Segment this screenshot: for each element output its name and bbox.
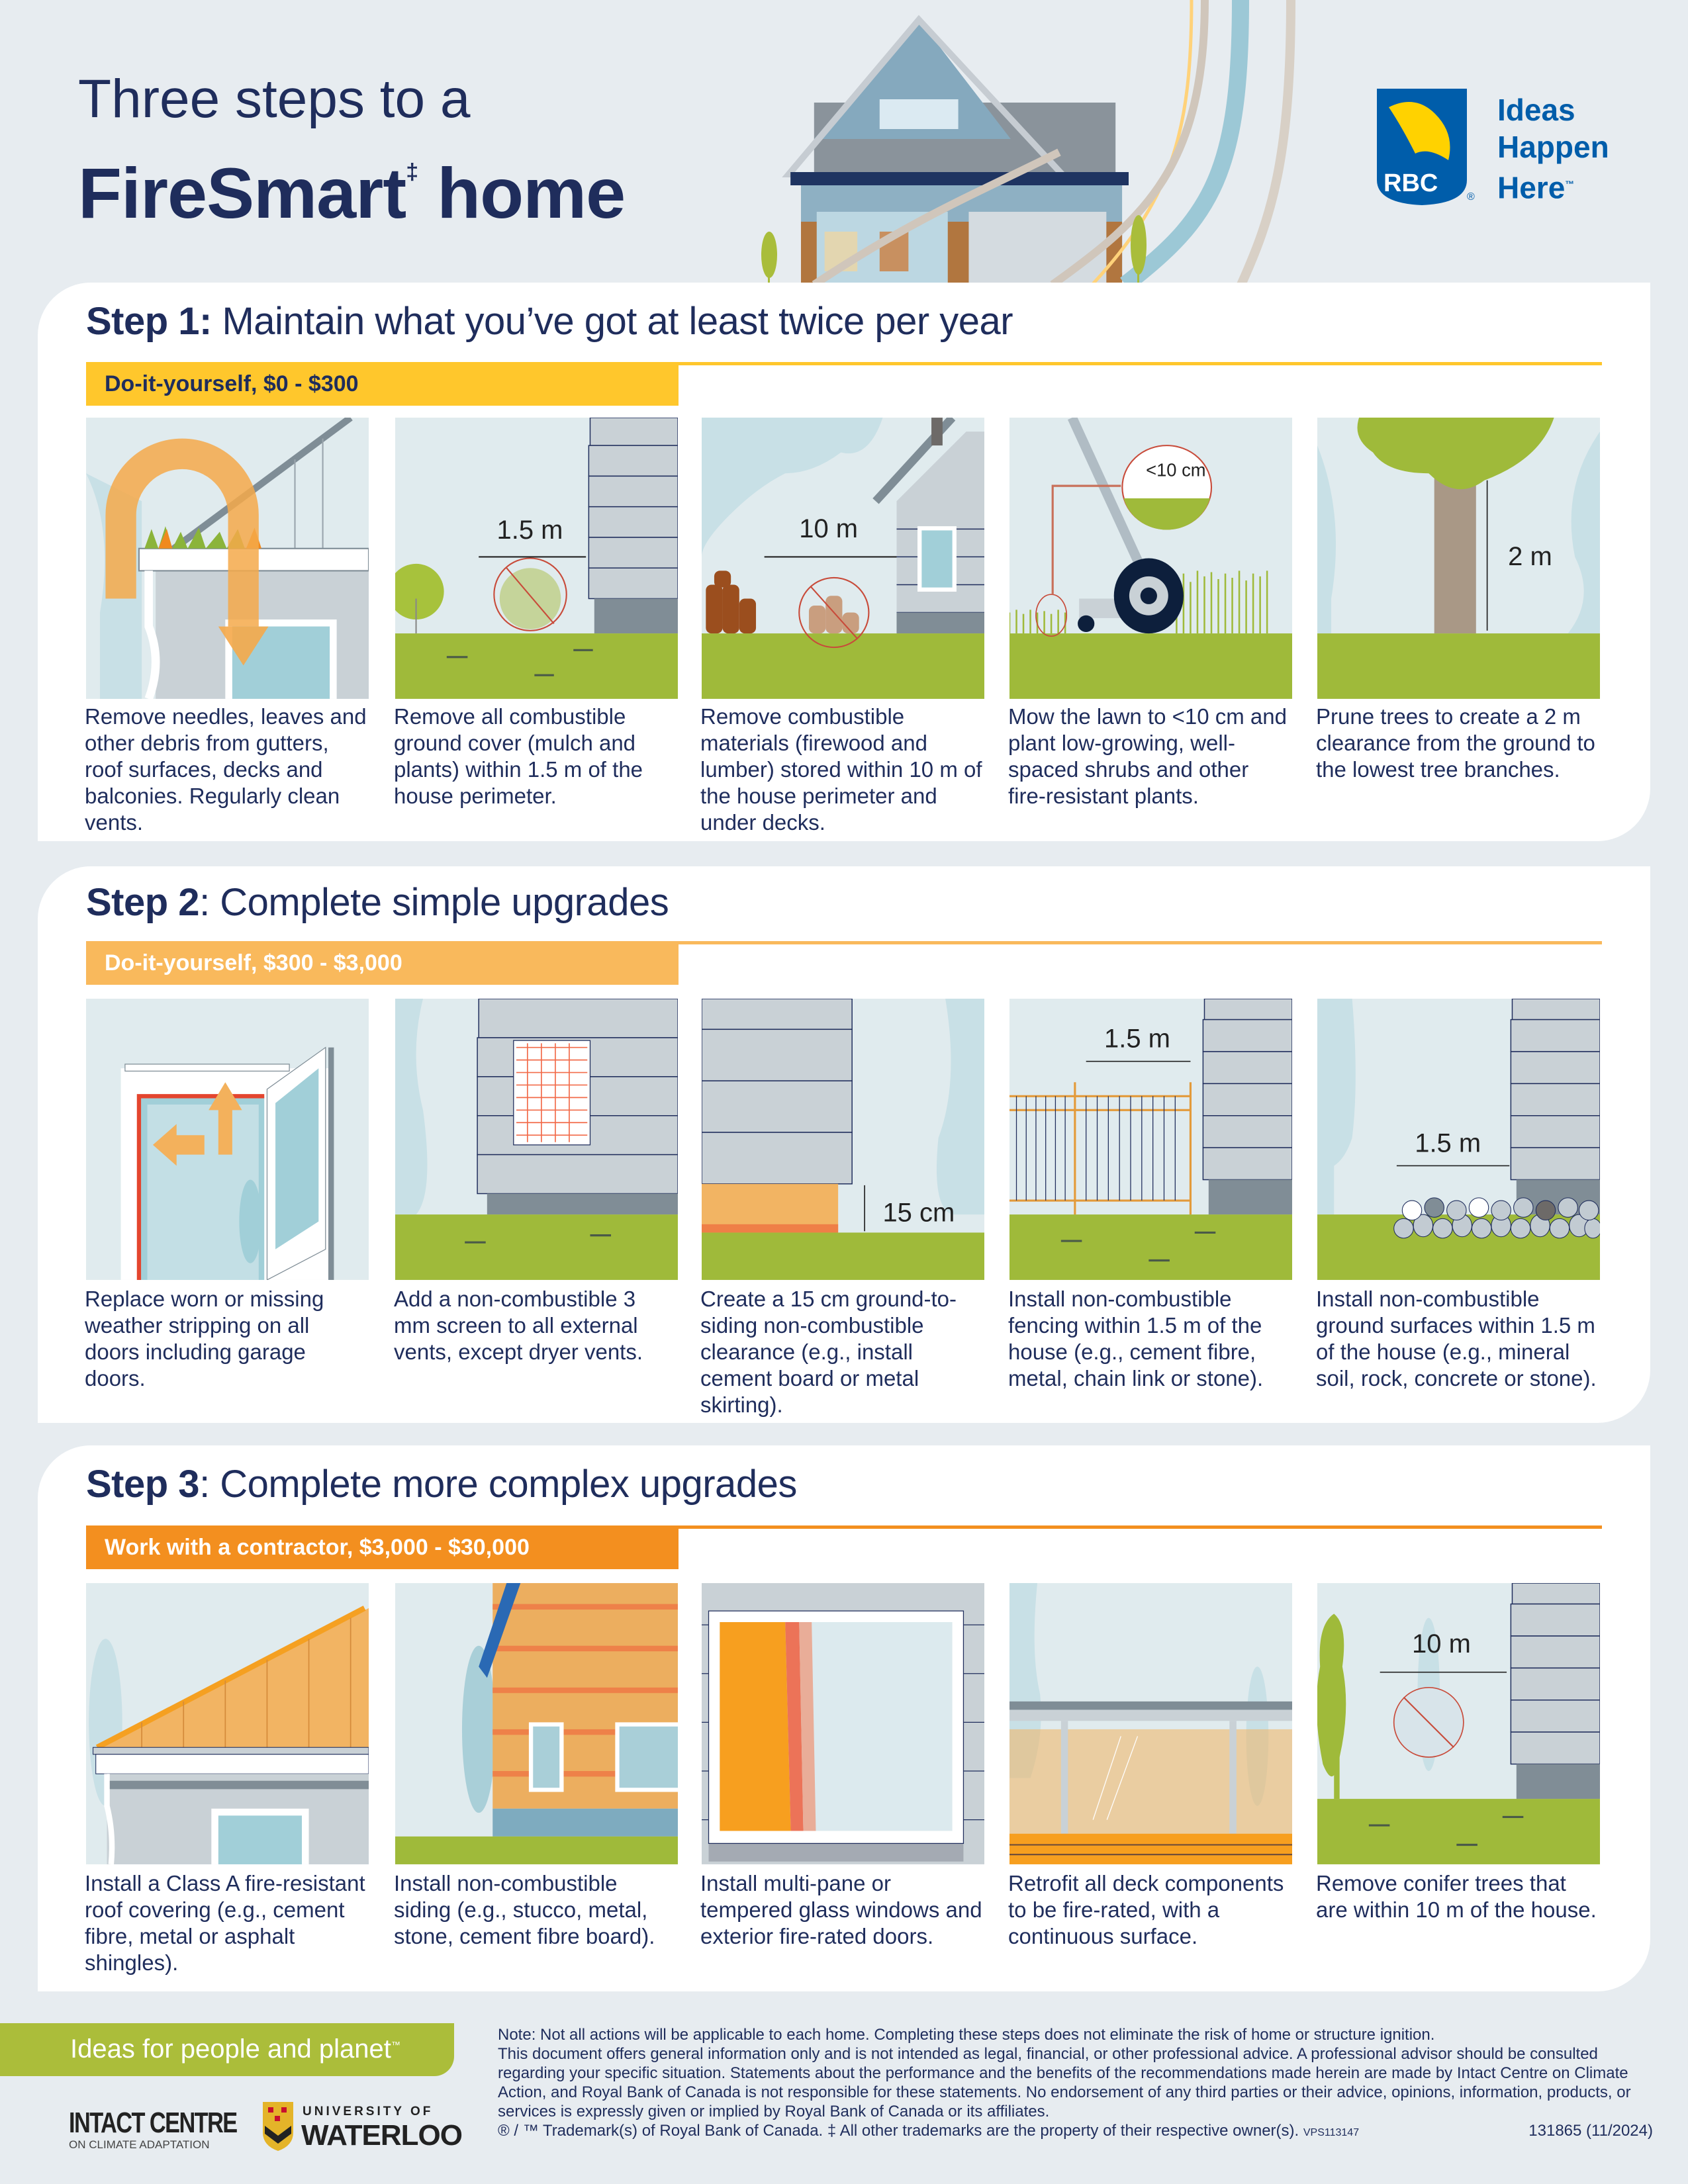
- heading: step 1: Step 1: Maintain what you’ve got at least twice per year: [86, 300, 1013, 343]
- panel: step 3: [38, 1445, 1650, 1991]
- icon: prune tree 2 m: 2 m: [1508, 542, 1552, 571]
- icon: door weather stripping: [86, 999, 369, 1280]
- text: disclaimer note: 131865 (11/2024): [1528, 2122, 1653, 2140]
- logo: University of Waterloo: [263, 2102, 462, 2152]
- icon: deck: [1009, 1583, 1292, 1864]
- text: step 1.2: Remove all combustible ground cover (mulch and plants) within 1.5 m of the house perimeter.: [394, 704, 643, 808]
- text: step 3.2: Install non-combustible siding (e.g., stucco, metal, stone, cement fibre board).: [394, 1871, 655, 1948]
- icon: lawn mower: [1009, 418, 1292, 699]
- logo: RBC: Here™: [1497, 170, 1574, 205]
- icon: prune tree 2 m: [1317, 418, 1600, 699]
- title: FireSmart‡ home: [78, 153, 625, 233]
- icon: lawn mower: <10 cm: [1146, 459, 1206, 480]
- icon: conifer 10 m: [1317, 1583, 1600, 1864]
- panel: step 2: [38, 866, 1650, 1423]
- text: step 3.1: Install a Class A fire-resistant roof covering (e.g., cement fibre, metal or asphalt shingles).: [85, 1871, 365, 1975]
- cost bar: step 3: Work with a contractor, $3,000 - $30,000: [105, 1535, 530, 1560]
- icon: conifer 10 m: 10 m: [1412, 1629, 1471, 1659]
- cost bar: step 2: [86, 941, 1602, 985]
- banner: ideas for people and planet: [0, 2023, 454, 2076]
- illustration: house with curves: [761, 0, 1295, 283]
- logo: RBC: [1377, 89, 1609, 205]
- text: disclaimer note: ® / ™ Trademark(s) of Royal Bank of Canada. ‡ All other trademarks are the property of their respective owner(s). VPS113147: [498, 2122, 1359, 2140]
- text: step 2.4: Install non-combustible fencing within 1.5 m of the house (e.g., cement fibre, metal, chain link or stone).: [1008, 1287, 1263, 1390]
- text: step 3.5: Remove conifer trees that are within 10 m of the house.: [1316, 1871, 1597, 1922]
- banner: ideas for people and planet: Ideas for people and planet™: [70, 2034, 400, 2064]
- icon: fencing 1.5 m: 1.5 m: [1104, 1024, 1170, 1054]
- icon: vent screen: [395, 999, 678, 1280]
- icon: siding clearance 15 cm: [702, 999, 984, 1280]
- heading: step 2: Step 2: Complete simple upgrades: [86, 881, 669, 924]
- icon: siding: [395, 1583, 678, 1864]
- logo: RBC: RBC: [1383, 169, 1438, 197]
- logo: RBC: ®: [1467, 191, 1475, 203]
- icon: roof covering: [86, 1583, 369, 1864]
- text: step 2.1: Replace worn or missing weather stripping on all doors including garage doors.: [85, 1287, 324, 1390]
- text: step 3.4: Retrofit all deck components to be fire-rated, with a continuous surface.: [1008, 1871, 1284, 1948]
- cost bar: step 2: Do-it-yourself, $300 - $3,000: [105, 950, 402, 976]
- title: Three steps to a: [78, 69, 471, 129]
- text: disclaimer note: This document offers general information only and is not intended as legal, financial, or other professional advice. A professional advisor should be consulted regarding your specific situation. Statements about the performance and the benefits of the recommendations made herein are made by Intact Centre on Climate Action, and Royal Bank of Canada is not responsible for these statements. No endorsement of any third parties or their advice, opinions, information, products, or services is expressly given or implied by Royal Bank of Canada or its affiliates.: [498, 2045, 1631, 2120]
- icon: fencing 1.5 m: [1009, 999, 1292, 1280]
- logo: Intact Centre: INTACT CENTRE: [69, 2107, 237, 2139]
- icon: ground surfaces rocks: 1.5 m: [1415, 1128, 1481, 1158]
- text: step 1.5: Prune trees to create a 2 m clearance from the ground to the lowest tree branches.: [1316, 704, 1595, 782]
- text: disclaimer note: Note: Not all actions will be applicable to each home. Completing these steps does not eliminate the risk of home or structure ignition.: [498, 2026, 1434, 2044]
- logo: University of Waterloo: WATERLOO: [301, 2119, 462, 2152]
- text: disclaimer note: [498, 2026, 1653, 2140]
- text: step 1.3: Remove combustible materials (firewood and lumber) stored within 10 m of the house perimeter and under decks.: [700, 704, 982, 835]
- text: step 2.3: Create a 15 cm ground-to-siding non-combustible clearance (e.g., install cement board or metal skirting).: [700, 1287, 957, 1417]
- icon: ground surfaces rocks: [1317, 999, 1600, 1280]
- icon: siding clearance 15 cm: 15 cm: [882, 1199, 955, 1228]
- cost bar: step 1: [86, 362, 1602, 406]
- text: step 1.1: Remove needles, leaves and other debris from gutters, roof surfaces, decks and balconies. Regularly clean vents.: [85, 704, 367, 835]
- icon: ground cover 1.5 m: [395, 418, 678, 699]
- cost bar: step 3: [86, 1525, 1602, 1569]
- text: step 2.5: Install non-combustible ground surfaces within 1.5 m of the house (e.g., mineral soil, rock, concrete or stone).: [1316, 1287, 1597, 1390]
- heading: step 3: Step 3: Complete more complex upgrades: [86, 1463, 797, 1506]
- text: step 2.2: Add a non-combustible 3 mm screen to all external vents, except dryer vents.: [394, 1287, 643, 1364]
- icon: windows: [702, 1583, 984, 1864]
- panel: step 1: [38, 283, 1650, 841]
- logo: RBC: Happen: [1497, 130, 1609, 164]
- logo: Intact Centre: ON CLIMATE ADAPTATION: [69, 2138, 210, 2151]
- text: step 3.3: Install multi-pane or tempered glass windows and exterior fire-rated doors.: [700, 1871, 982, 1948]
- cost bar: step 1: Do-it-yourself, $0 - $300: [105, 371, 359, 396]
- logo: University of Waterloo: UNIVERSITY OF: [303, 2105, 433, 2118]
- icon: ground cover 1.5 m: 1.5 m: [497, 516, 563, 545]
- icon: firewood 10 m: [702, 418, 984, 699]
- text: step 1.4: Mow the lawn to <10 cm and plant low-growing, well-spaced shrubs and other fire-resistant plants.: [1008, 704, 1287, 808]
- icon: firewood 10 m: 10 m: [799, 514, 858, 543]
- title: [78, 69, 625, 233]
- logo: RBC: Ideas: [1497, 93, 1575, 127]
- icon: gutters: [86, 418, 369, 699]
